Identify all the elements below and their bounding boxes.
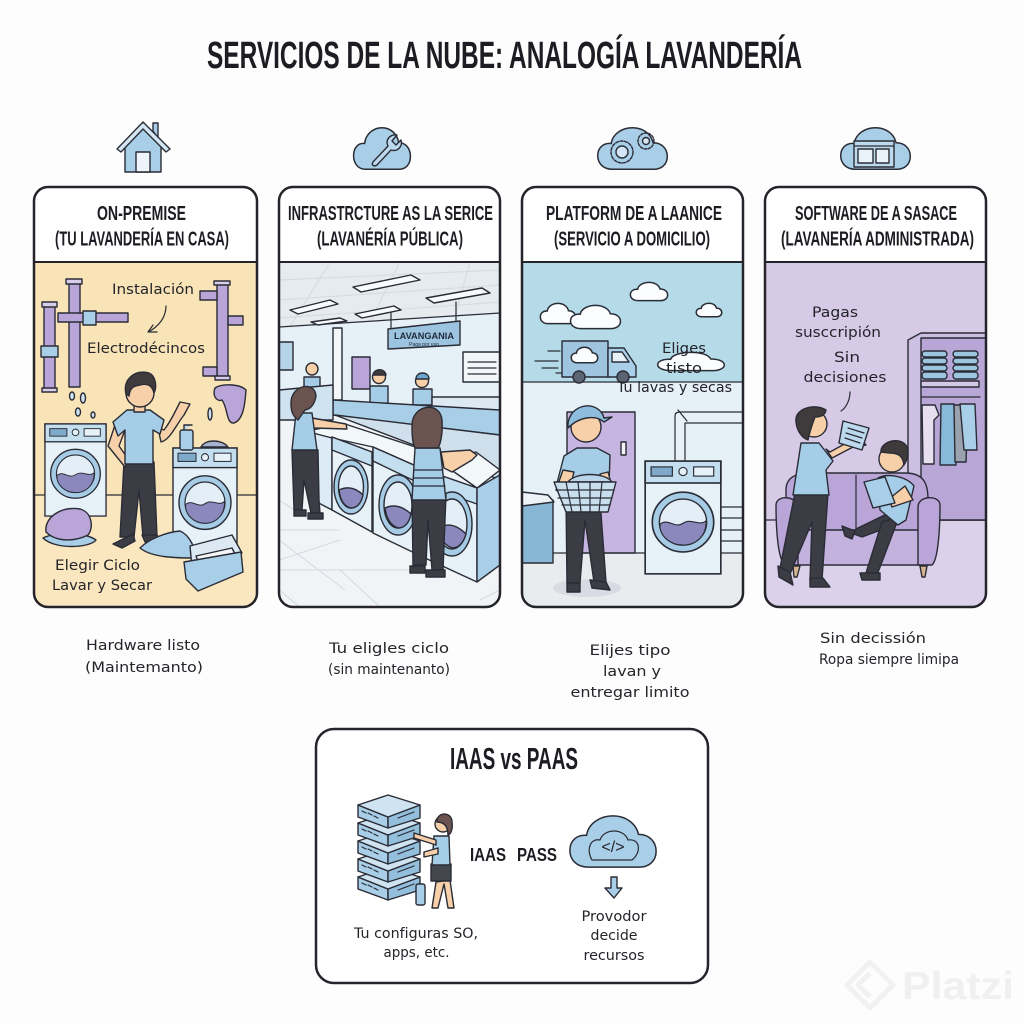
hamper [522,492,554,563]
panel: software as a service [765,187,986,607]
icon: cloud with app window [841,128,910,169]
blue cloth [140,531,196,558]
icon: house [117,122,170,172]
label: Instalación: Instalación [112,282,194,298]
folded towels [922,351,978,379]
server stack [358,795,420,900]
caption: software [819,631,959,668]
pipes [41,279,243,392]
woman at server [414,814,454,908]
seated man [842,441,914,580]
caption: on-premise: Hardware listo [86,638,200,654]
panel heading: on-premise: ON-PREMISE [97,203,186,225]
label: tisto: tisto [666,361,702,377]
text: proveedor decide: decide [590,928,638,944]
label: suscripción: susccripión [795,325,881,341]
washer left [45,424,106,516]
label: Sin: Sin [834,350,860,366]
scene: home delivery [522,262,743,607]
text: tu configuras: Tu configuras SO, [353,926,478,942]
label: IAAS: IAAS [470,845,506,865]
held tablet [839,421,869,450]
text: proveedor decide: recursos [584,948,644,964]
label: PASS: PASS [517,845,557,865]
front row of washers [300,415,500,582]
label: Electrodécincos: Electrodécincos [87,341,205,357]
delivery man [553,406,621,597]
label: decisiones: decisiones [804,370,886,386]
caption: infrastructure: Tu eligles ciclo [328,641,449,657]
back wall items [333,328,342,400]
sign: Paga por uso [409,342,439,348]
label: Tu lavas y secas: Tu lavas y secas [616,380,732,396]
bottle [416,884,425,905]
clouds [540,282,724,371]
watermark: Platzi: Platzi [902,965,1014,1008]
icon: cloud with gears [598,128,667,169]
clothes pile [43,509,96,546]
arrow down [605,877,622,898]
panel heading: on-premise: (TU LAVANDERÍA EN CASA) [55,228,229,250]
text: tu configuras [353,926,478,961]
hanging purple cloth [214,385,246,423]
caption: platform: Elijes tipo [590,643,670,659]
washer right [173,448,237,549]
arrow [148,306,166,332]
caption: infrastructure [328,641,450,678]
text: tu configuras: apps, etc. [384,945,450,961]
door [567,412,635,553]
panel heading: platform [546,203,722,250]
panel heading: software [781,203,974,250]
caption: platform [570,643,690,701]
clothes on washer [201,441,228,447]
soap bottle [180,425,193,450]
wardrobe [908,333,986,520]
panel heading: on-premise [55,203,229,250]
caption: software: Sin decissión [820,631,926,647]
text: proveedor decide: Provodor [582,909,647,925]
caption: infrastructure: (sin maintenanto) [328,662,450,678]
water drops [70,392,212,420]
counter [431,396,499,409]
scene: home laundry [34,262,257,607]
panel: on-premise [34,187,257,607]
ceiling lights [290,275,490,325]
label: Elegir Ciclo: Elegir Ciclo [55,558,140,574]
hanging clothes [922,404,977,465]
caption: software: Ropa siempre limipa [819,652,959,668]
floor tile lines [279,500,500,607]
panel: platform as a service [522,187,743,607]
washer [645,461,721,574]
delivery truck [535,341,636,383]
woman right [410,407,477,577]
laundry basket [554,474,616,512]
caption: on-premise [85,638,203,676]
standing man [778,407,866,587]
man [108,372,190,548]
label: Eliges: Eliges [662,341,706,357]
staff in back [304,363,432,405]
panel heading: infrastructure: (LAVANÉRÍA PÚBLICA) [317,226,463,250]
ceiling [279,262,500,327]
panel heading: platform: PLATFORM DE A LAANICE [546,203,722,225]
panel: infrastructure as a service [279,187,500,607]
basket [184,535,243,591]
label: Lavar y Secar: Lavar y Secar [52,578,152,594]
icon: cloud with wrench [354,128,410,169]
panel heading: infrastructure [288,203,493,250]
sign [388,302,460,349]
text: proveedor decide [582,909,647,964]
wall piping [675,410,743,460]
caption: platform: lavan y [603,664,661,680]
comparison title: IAAS vs PAAS [450,741,578,776]
caption: platform: entregar limito [570,685,690,701]
sofa [776,473,940,577]
watermark: Platzi [847,962,1014,1008]
woman left [291,386,347,519]
scene: managed laundry [765,262,986,607]
panel heading: platform: (SERVICIO A DOMICILIO) [554,228,710,250]
caption: on-premise: (Maintemanto) [85,660,203,676]
scene: public laundromat [279,262,500,607]
panel: iaas vs paas [316,729,708,983]
cloud with code [570,816,656,867]
panel heading: infrastructure: INFRASTRCTURE AS LA SERICE [288,203,493,225]
sign: LAVANGANIA [394,331,455,341]
cloud with code: </> [601,839,625,856]
label: Pagas: Pagas [812,305,858,321]
steps [722,507,743,541]
speech tail [841,392,850,411]
